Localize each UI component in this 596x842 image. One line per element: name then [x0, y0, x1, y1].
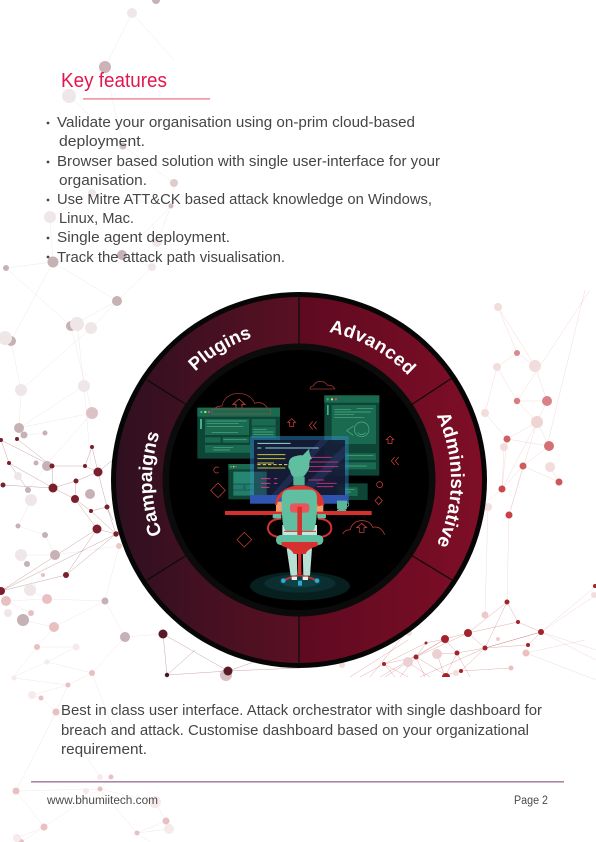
label: Campaigns: Campaigns [138, 432, 160, 536]
icon: small cloud [310, 381, 335, 389]
window: left [197, 408, 280, 459]
footer website: www.bhumiitech.com [46, 795, 158, 807]
label: Advanced: Advanced [329, 320, 417, 375]
bullet: mitre [47, 192, 432, 227]
icon: diamond lower [237, 532, 252, 547]
headrest [290, 503, 309, 513]
icon: floor glow [250, 572, 350, 600]
paragraph: Best in class user interface. Attack orchestrator with single dashboard for [61, 702, 542, 719]
icon: upload arrow [233, 399, 245, 410]
icon: diamond left [211, 483, 225, 498]
desk [225, 511, 372, 515]
icon: house arrow centre [288, 419, 296, 426]
trousers [282, 525, 317, 538]
bullet: mitre: Use Mitre ATT&CK based attack knowledge on Windows, [57, 192, 432, 208]
armrests [268, 519, 331, 537]
label: Plugins: Plugins [188, 330, 250, 371]
shoulders [275, 486, 324, 506]
icon: cloud lower right [343, 521, 385, 535]
bullet: agent: Single agent deployment. [57, 230, 230, 246]
icon: coffee cup [337, 501, 349, 511]
hair and head [288, 449, 312, 479]
bullet: browser: Browser based solution with single user-interface for your [57, 154, 440, 170]
bullet: validate [47, 115, 415, 150]
icon: circle right [377, 482, 383, 488]
window: small right [337, 483, 368, 500]
label: Administrative: Administrative [436, 415, 465, 546]
window: small left [228, 464, 267, 499]
bullet: validate: deployment. [59, 134, 145, 150]
icon: cloud top left [213, 393, 270, 413]
monitor with code [233, 436, 349, 504]
footer page number: Page 2 [514, 795, 548, 807]
seat [276, 535, 323, 545]
decorative line icons [211, 381, 399, 547]
bullet: track: Track the attack path visualisation. [57, 250, 285, 266]
icon: house arrow right [386, 436, 394, 444]
title: Key features [61, 69, 167, 92]
bullet: mitre: Linux, Mac. [59, 211, 134, 227]
illustration: person at desk with screens [197, 381, 399, 600]
paragraph: requirement. [61, 741, 147, 758]
icon: arrows centre [309, 421, 317, 429]
icon: circle left [214, 467, 219, 473]
chair back [282, 490, 317, 532]
paragraph: breach and attack. Customise dashboard based on your organizational [61, 722, 529, 739]
icon: arrows right [391, 457, 399, 465]
footer rule [31, 781, 564, 783]
chair base [283, 575, 317, 581]
icon: diamond right [375, 497, 382, 505]
circular diagram [111, 292, 487, 668]
neck and arms [293, 477, 305, 485]
bullet: browser [47, 154, 440, 189]
bullet: validate: Validate your organisation using on-prim cloud-based [57, 115, 415, 131]
paragraph [61, 702, 542, 758]
bullet: browser: organisation. [59, 173, 147, 189]
window: right [324, 395, 379, 476]
person and chair [268, 449, 331, 586]
feature list [47, 115, 440, 266]
